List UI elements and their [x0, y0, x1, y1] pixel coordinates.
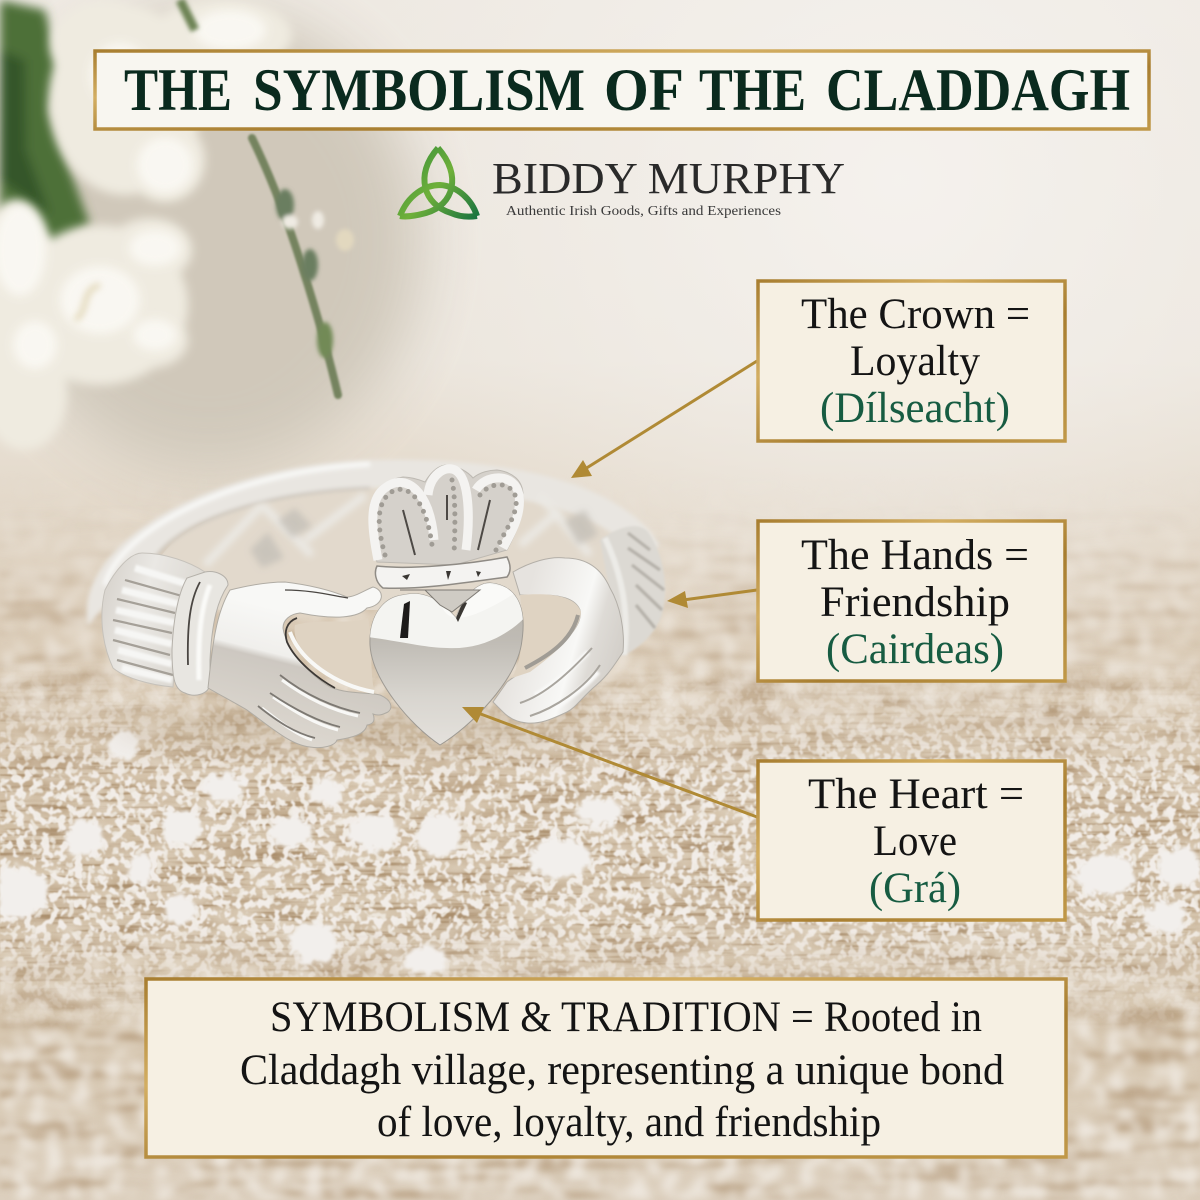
arrow: heart	[462, 707, 757, 817]
icon: trinity knot	[400, 148, 477, 217]
ring shadow	[110, 710, 590, 746]
back band with lattice	[87, 460, 660, 625]
panel: symbolism and tradition: SYMBOLISM & TRADITION = Rooted in	[270, 994, 982, 1041]
left hand	[102, 553, 391, 748]
illustration: Claddagh ring	[87, 460, 665, 748]
salt clumps	[0, 731, 1200, 974]
arrow: crown	[571, 361, 757, 478]
right cuff	[600, 526, 665, 656]
heart	[369, 582, 524, 746]
logo: Biddy Murphy: BIDDY MURPHY	[492, 154, 845, 203]
cuff band	[172, 572, 228, 695]
callout: the hands: The Hands =	[801, 532, 1029, 579]
title banner: CLADDAGH	[826, 57, 1130, 123]
arrow: hands	[667, 590, 757, 608]
callout: the heart: (Grá)	[869, 865, 961, 912]
callout: the hands: (Cairdeas)	[826, 626, 1004, 673]
title banner: SYMBOLISM	[253, 57, 585, 123]
hole in hand	[295, 618, 374, 690]
title banner: OF	[604, 57, 684, 123]
logo: Biddy Murphy	[400, 148, 845, 219]
callout: the heart: The Heart =	[808, 771, 1024, 818]
callout: the crown	[758, 281, 1065, 441]
logo: Biddy Murphy: Authentic Irish Goods, Gifts and Experiences	[506, 204, 781, 219]
callout: the crown: (Dílseacht)	[820, 385, 1010, 432]
callout: the hands	[758, 521, 1065, 681]
callout: the crown: Loyalty	[850, 338, 980, 385]
crown	[369, 465, 523, 612]
flowers and greenery, top left	[0, 0, 354, 450]
left cuff	[102, 553, 205, 687]
callout: the crown: The Crown =	[801, 291, 1030, 338]
title banner	[95, 51, 1149, 129]
callout: the heart: Love	[873, 818, 957, 865]
panel: symbolism and tradition	[146, 979, 1066, 1157]
callout: the hands: Friendship	[820, 579, 1010, 626]
palm and fingers	[208, 582, 391, 748]
panel: symbolism and tradition: of love, loyalty, and friendship	[377, 1099, 881, 1146]
callout: the heart	[758, 761, 1065, 920]
title banner: THE	[699, 57, 806, 123]
title banner: THE	[124, 57, 232, 123]
panel: symbolism and tradition: Claddagh village, representing a unique bond	[240, 1047, 1004, 1094]
right hand	[493, 558, 623, 723]
